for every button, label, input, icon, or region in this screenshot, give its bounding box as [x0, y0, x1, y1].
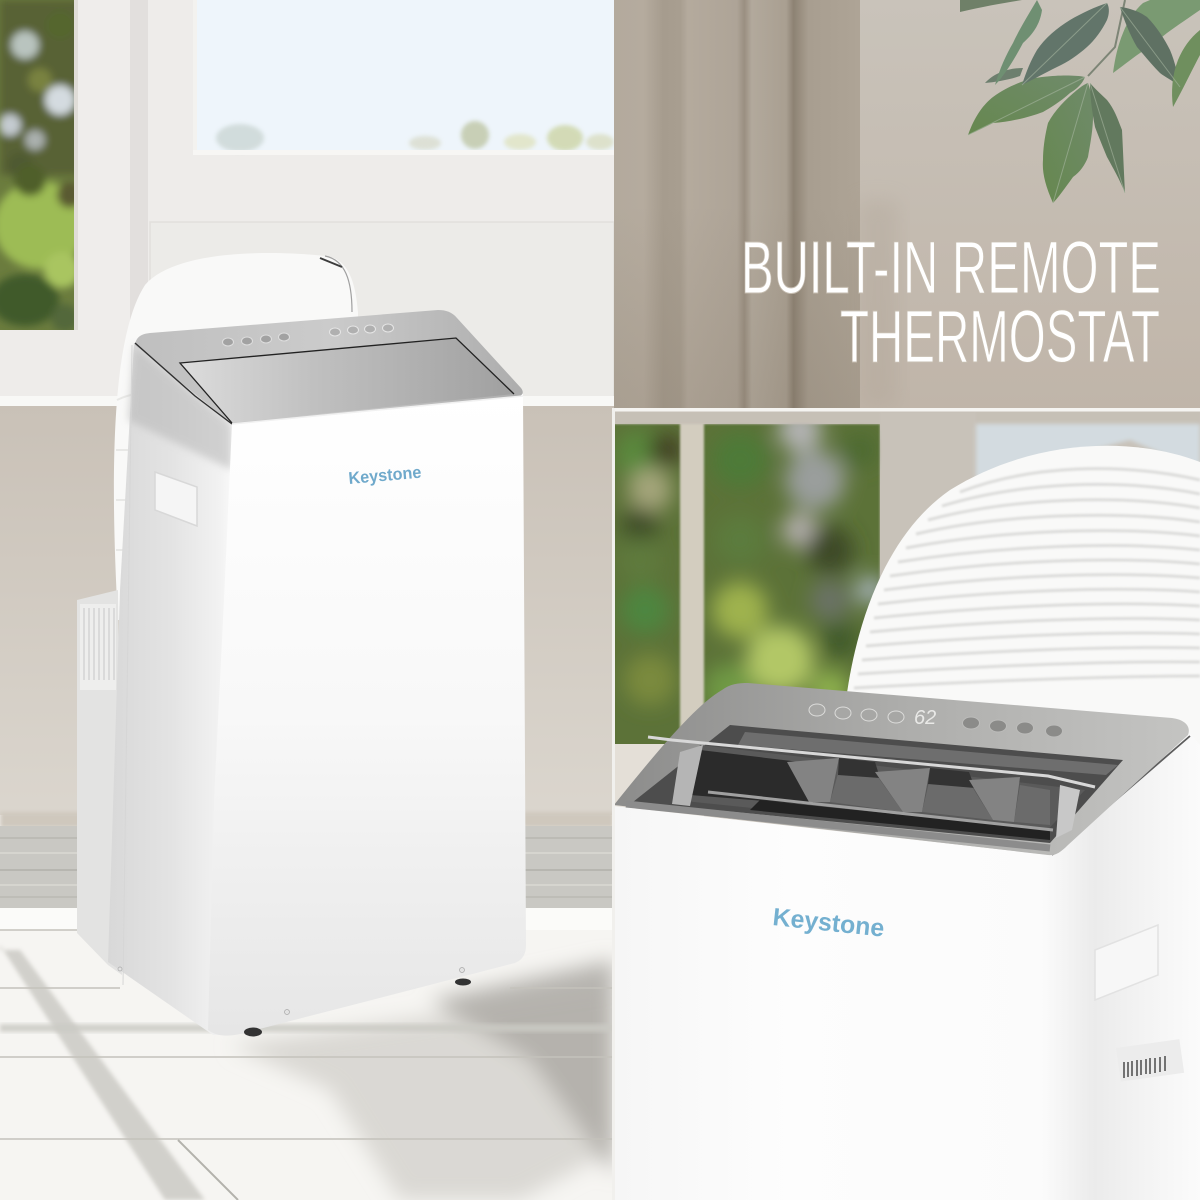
fin 1	[787, 758, 839, 802]
left vane bracket	[672, 745, 703, 806]
side handle	[155, 472, 197, 526]
left sill	[0, 330, 130, 406]
dark recess	[690, 750, 815, 805]
rear vent box	[77, 590, 122, 975]
interior shelf	[738, 732, 1118, 775]
leaf far right	[1172, 30, 1200, 107]
window frame	[78, 0, 130, 332]
barcode label	[1116, 1039, 1184, 1082]
blurred window with greenery	[615, 408, 884, 757]
front top highlight	[232, 396, 523, 424]
sill under glass	[193, 150, 614, 155]
logo: Keystone: Keystone	[771, 903, 886, 943]
lower beige wall	[0, 406, 614, 820]
leaf narrow	[995, 0, 1042, 85]
blurred background wall	[615, 412, 1200, 852]
panel: bottom right close-up	[614, 408, 1200, 1200]
front face	[208, 394, 526, 1036]
floor shadows	[230, 960, 614, 1200]
leaf right lower	[1090, 83, 1125, 193]
left display buttons	[809, 704, 904, 723]
temperature display: 62	[914, 707, 936, 729]
fin panels	[830, 770, 1050, 825]
leaf top right	[1120, 7, 1180, 87]
plant leaves	[960, 0, 1200, 203]
right control buttons	[962, 717, 1062, 737]
lower wall panel	[150, 222, 614, 398]
vane lower bar	[708, 792, 1053, 830]
exhaust hose	[114, 253, 358, 620]
leaf lower	[1043, 83, 1093, 203]
frame groove	[130, 0, 148, 345]
leaf bright back	[1113, 0, 1200, 73]
curtain lower shading	[614, 0, 860, 408]
left window with tree	[0, 0, 86, 332]
wall	[614, 0, 1200, 408]
silver top	[614, 683, 1189, 855]
control buttons left	[222, 333, 290, 346]
curtain	[614, 0, 860, 408]
blurred sill	[615, 744, 704, 816]
leaf top centre	[1022, 3, 1109, 85]
leaf top-left	[960, 0, 1022, 12]
heading: Built-in Remote Thermostat	[741, 226, 1161, 378]
right silver edge	[1052, 736, 1190, 855]
windowsill edge	[0, 396, 614, 406]
panel: top right curtain and wall	[614, 0, 1200, 408]
window top band	[615, 412, 880, 426]
air outlet	[633, 725, 1123, 843]
fin 2	[875, 768, 930, 812]
side face	[108, 343, 233, 1035]
side upper shading	[128, 345, 232, 470]
side handle	[1095, 925, 1158, 1000]
glass lid	[180, 338, 514, 423]
window wall	[148, 0, 614, 282]
air conditioner close-up	[614, 683, 1200, 1200]
blurred right window	[976, 424, 1200, 480]
outlet interior	[675, 745, 1085, 838]
floor	[0, 812, 614, 1200]
leaf small back	[985, 68, 1023, 83]
panel: left room scene	[0, 0, 614, 1200]
lid outline	[180, 338, 514, 423]
lower dark strip	[750, 800, 1050, 840]
air conditioner: full unit	[77, 253, 526, 1036]
body	[614, 733, 1200, 1200]
logo: Keystone: Keystone	[348, 463, 422, 488]
screws	[118, 967, 464, 1014]
fin upper shadow	[838, 758, 975, 788]
side panel seam	[123, 345, 132, 985]
fin 3	[969, 777, 1020, 822]
top left dark edge	[135, 343, 232, 424]
vane upper bar	[648, 737, 1095, 787]
leaf veins	[968, 3, 1180, 203]
wheels	[244, 978, 471, 1036]
divider lines	[612, 408, 1200, 1200]
leaf left	[968, 76, 1085, 135]
blurred wall pillar	[878, 424, 892, 580]
main window glass	[193, 0, 614, 152]
right vane bracket	[1056, 785, 1080, 838]
control buttons right	[330, 324, 394, 336]
ribbed hose	[847, 446, 1200, 745]
curtain wall shadow	[858, 200, 898, 408]
front lip	[626, 804, 1050, 848]
silver top	[135, 310, 523, 424]
